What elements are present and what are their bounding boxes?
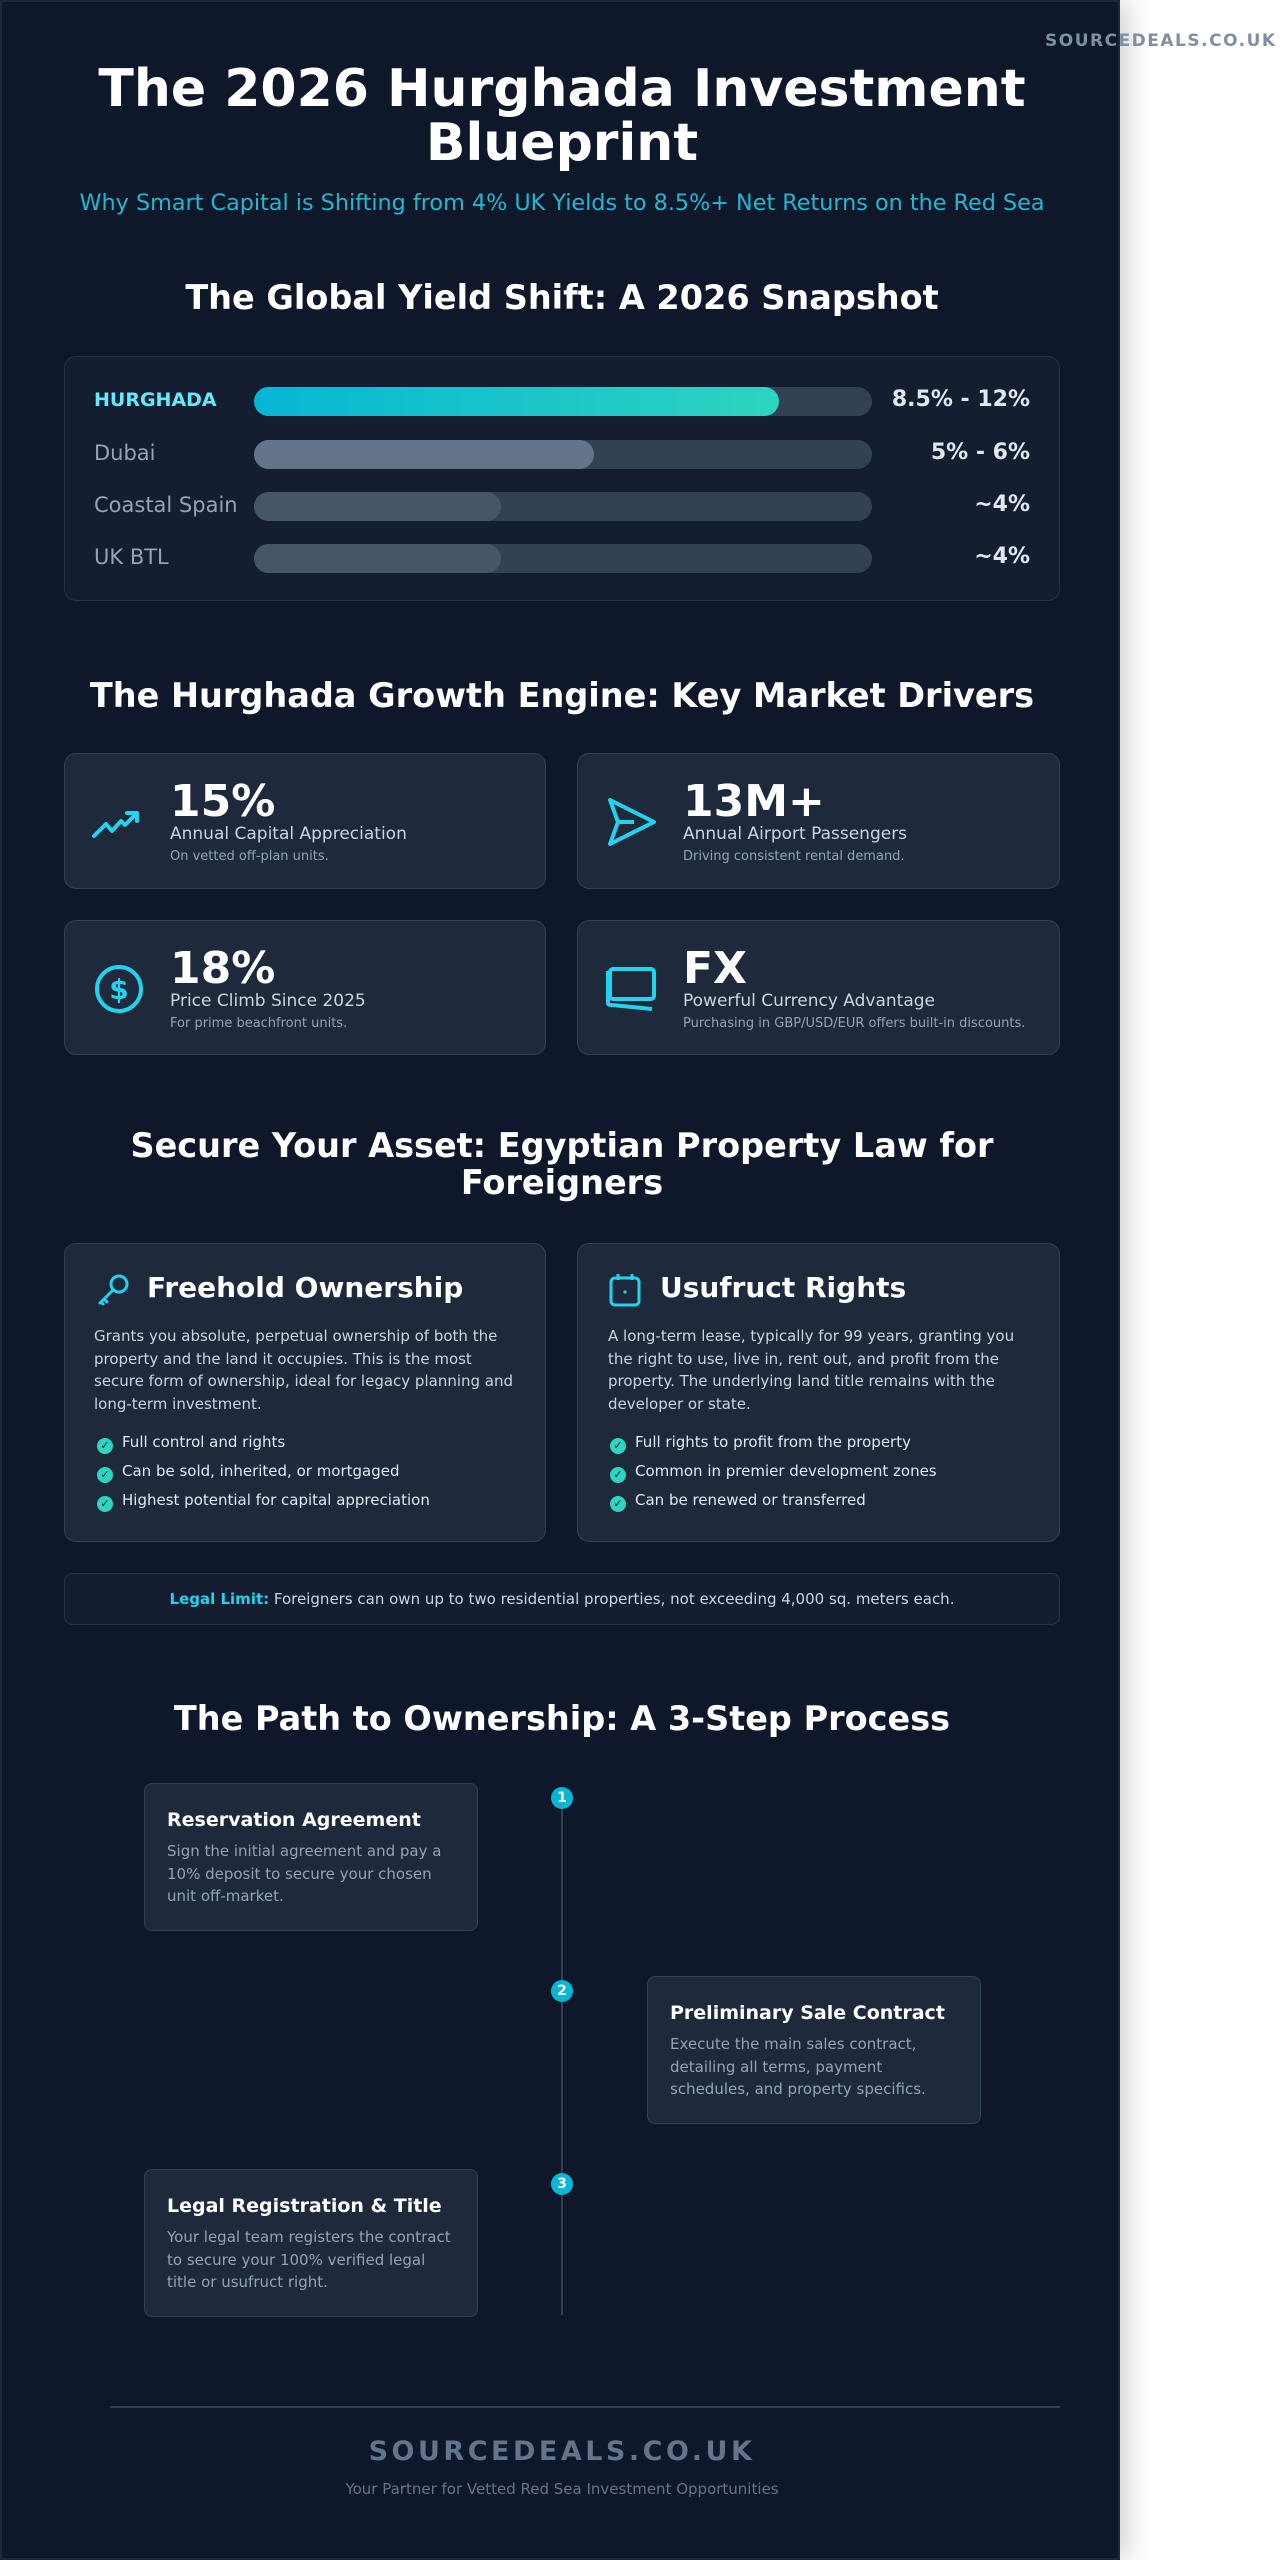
- watermark: SOURCEDEALS.CO.UK: [1045, 31, 1277, 51]
- step 2 card: [647, 1976, 981, 2124]
- icon: trend: [92, 811, 139, 838]
- heading: property law: Foreigners: [461, 1163, 663, 1202]
- row: Hurghada: [94, 387, 1030, 416]
- heading: property law: [130, 1126, 994, 1202]
- card: FX: Powerful Currency Advantage: [683, 991, 935, 1011]
- card: 13M+: Driving consistent rental demand.: [683, 849, 905, 864]
- step 3 card: [144, 2169, 478, 2317]
- card: usufruct: Usufruct Rights: [660, 1271, 906, 1304]
- row: Dubai: 5% - 6%: [931, 440, 1030, 465]
- card: 18%: [64, 920, 546, 1055]
- heading: path to ownership: The Path to Ownership: A 3-Step Process: [174, 1699, 950, 1738]
- row: Coastal Spain: Coastal Spain: [94, 493, 238, 517]
- timeline: [144, 1783, 981, 2317]
- subtitle: Why Smart Capital is Shifting from 4% UK Yields to 8.5%+ Net Returns on the Red Sea: [80, 190, 1044, 216]
- icon: dollar: $: [109, 973, 129, 1006]
- card: 15%: On vetted off-plan units.: [170, 849, 329, 864]
- icon: plane: [608, 798, 656, 846]
- icon: currency: [606, 967, 656, 1011]
- card: usufruct: ✓: [613, 1468, 623, 1481]
- card: 18%: 18%: [170, 943, 275, 994]
- card: FX: Purchasing in GBP/USD/EUR offers built-in discounts.: [683, 1016, 1025, 1031]
- row: UK BTL: ~4%: [974, 544, 1030, 569]
- heading: property law: Secure Your Asset: Egyptian Property Law for: [130, 1126, 994, 1165]
- step 1 card: Sign the initial agreement and pay a 10% deposit to secure your chosen unit off-market.: [167, 1842, 441, 1905]
- card: usufruct: Common in premier development zones: [635, 1462, 937, 1480]
- row: Dubai: Dubai: [94, 441, 156, 465]
- step 3 dot: 3: [557, 2176, 567, 2192]
- row: Coastal Spain: ~4%: [974, 492, 1030, 517]
- card: usufruct: Can be renewed or transferred: [635, 1491, 866, 1509]
- panel: yield bar chart: [64, 356, 1060, 601]
- row: Hurghada: HURGHADA: [94, 389, 217, 411]
- card: 18%: For prime beachfront units.: [170, 1016, 347, 1031]
- step 1 dot: 1: [557, 1790, 567, 1806]
- card: freehold: ✓: [100, 1497, 110, 1510]
- card: 13M+: 13M+: [683, 776, 825, 827]
- card: freehold: Can be sold, inherited, or mortgaged: [122, 1462, 400, 1480]
- row: Hurghada: 8.5% - 12%: [892, 387, 1030, 412]
- step 3 card: Legal Registration & Title: [167, 2195, 442, 2217]
- card: 15%: 15%: [170, 776, 275, 827]
- card: FX: FX: [683, 943, 747, 994]
- title: [98, 59, 1026, 173]
- callout: legal limit: Legal Limit: Foreigners can own up to two residential properties, not exceeding 4,000 sq. meters each.: [170, 1590, 954, 1608]
- card: usufruct: ✓: [613, 1439, 623, 1452]
- step 1 card: Reservation Agreement: [167, 1809, 421, 1831]
- step 2 card: Execute the main sales contract, detailing all terms, payment schedules, and property specifics.: [670, 2035, 926, 2098]
- icon: key: [98, 1274, 128, 1306]
- step 2 card: Preliminary Sale Contract: [670, 2002, 945, 2024]
- icon: calendar: [610, 1274, 640, 1306]
- card: freehold: Full control and rights: [122, 1433, 285, 1451]
- card: freehold: Freehold Ownership: [147, 1271, 463, 1304]
- step 1 card: [144, 1783, 478, 1931]
- icon: dollar: [95, 965, 143, 1013]
- heading: growth engine: The Hurghada Growth Engine: Key Market Drivers: [90, 676, 1034, 715]
- row: UK BTL: [94, 544, 1030, 573]
- timeline line: [561, 1798, 563, 2315]
- card: freehold: [64, 1243, 546, 1542]
- card: 13M+: [577, 753, 1060, 889]
- row: Coastal Spain: [94, 492, 1030, 521]
- step 3 card: Your legal team registers the contract to secure your 100% verified legal title or usufruct right.: [167, 2228, 451, 2291]
- heading: yield shift: The Global Yield Shift: A 2026 Snapshot: [185, 278, 939, 317]
- card: usufruct: Full rights to profit from the property: [635, 1433, 911, 1451]
- card: freehold: ✓: [100, 1468, 110, 1481]
- card: 15%: Annual Capital Appreciation: [170, 824, 407, 844]
- card: 13M+: Annual Airport Passengers: [683, 824, 907, 844]
- step 2 dot: [551, 1980, 573, 2002]
- card: freehold: ✓: [100, 1439, 110, 1452]
- row: UK BTL: UK BTL: [94, 545, 169, 569]
- card: FX: [577, 920, 1060, 1055]
- card: freehold: Highest potential for capital appreciation: [122, 1491, 430, 1509]
- title: Blueprint: [426, 113, 698, 173]
- card: usufruct: A long-term lease, typically for 99 years, granting you the right to use, live in, rent out, and profit from the property. The underlying land title remains with the developer or state.: [608, 1327, 1014, 1412]
- footer brand: SOURCEDEALS.CO.UK: [369, 2436, 755, 2467]
- card: 15%: [64, 753, 546, 889]
- row: Dubai: [94, 440, 1030, 469]
- title: The 2026 Hurghada Investment: [98, 59, 1026, 119]
- step 3 dot: [551, 2173, 573, 2195]
- step 1 dot: [551, 1787, 573, 1809]
- step 2 dot: 2: [557, 1983, 567, 1999]
- footer tagline: Your Partner for Vetted Red Sea Investment Opportunities: [345, 2480, 779, 2498]
- callout: legal limit: [64, 1573, 1060, 1625]
- card: 18%: Price Climb Since 2025: [170, 991, 366, 1011]
- card: usufruct: [577, 1243, 1060, 1542]
- card: usufruct: ✓: [613, 1497, 623, 1510]
- card: freehold: Grants you absolute, perpetual ownership of both the property and the land it occupies. This is the most secure form of ownership, ideal for legacy planning and long-term investment.: [94, 1327, 513, 1412]
